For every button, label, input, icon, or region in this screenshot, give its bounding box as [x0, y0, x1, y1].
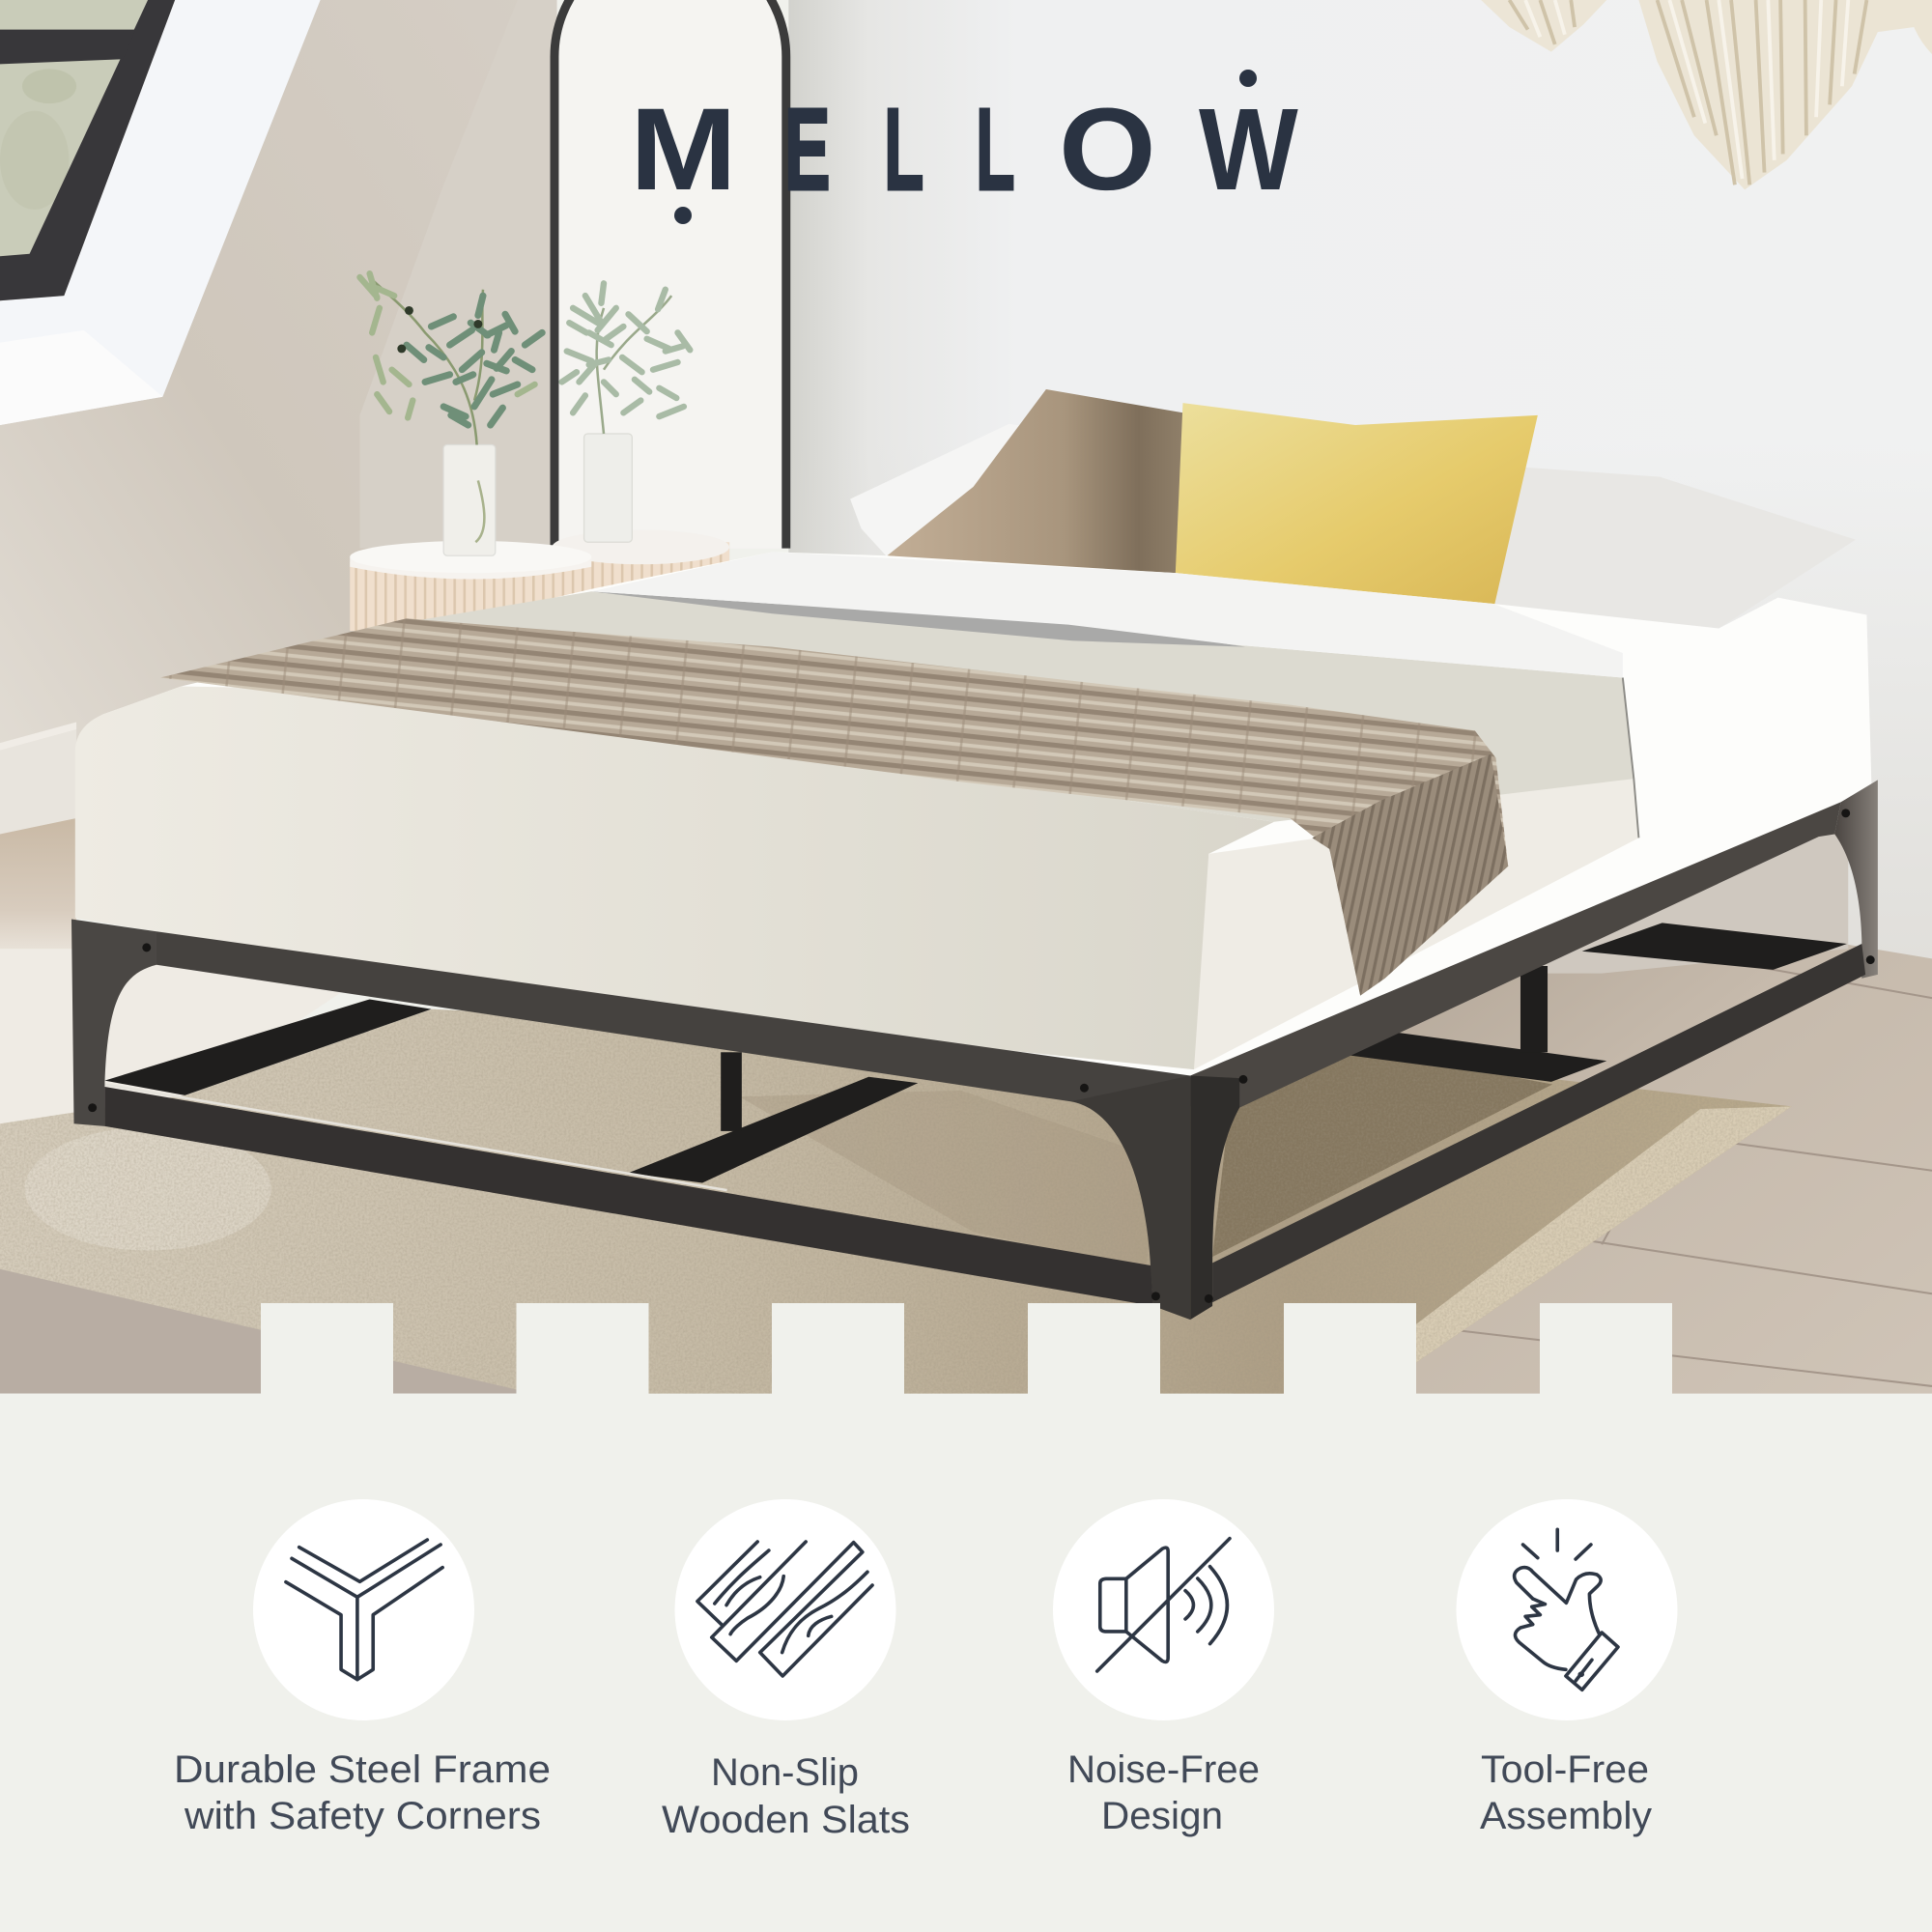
- logo: MELLOW: E: [784, 83, 830, 214]
- feature: noise-free: [1053, 1499, 1274, 1837]
- label: noise-free design: [1067, 1748, 1260, 1837]
- front left leg: [71, 920, 156, 1126]
- label: wooden slats: Wooden Slats: [662, 1799, 910, 1841]
- label: noise-free design: Noise-Free: [1067, 1748, 1260, 1791]
- rug: [0, 1005, 1799, 1410]
- macrame wall hanging: [1481, 0, 1932, 189]
- label: durable steel frame: [174, 1748, 551, 1837]
- logo: MELLOW: O: [1059, 83, 1156, 214]
- front rail top: [156, 931, 1190, 1106]
- round side table: [350, 541, 591, 631]
- crenellated panel notches: [261, 1303, 1672, 1395]
- label: tool-free assembly: Assembly: [1480, 1795, 1652, 1837]
- bedroom photo scene: [0, 0, 1932, 1410]
- panel: features: [0, 1394, 1932, 1932]
- icon: steel corner: [253, 1499, 474, 1720]
- icon: muted speaker: [1053, 1499, 1274, 1720]
- label: noise-free design: Design: [1101, 1795, 1223, 1837]
- rear wall under bed: [1543, 829, 1849, 974]
- sloped beige wall: [0, 0, 557, 863]
- logo: MELLOW: L: [884, 83, 923, 214]
- rear right leg: [1834, 780, 1878, 979]
- reflected vase and plant: [562, 283, 690, 542]
- label: tool-free assembly: [1480, 1748, 1652, 1837]
- under-bed cross rails: [104, 923, 1847, 1182]
- arched mirror: [554, 0, 786, 549]
- right wall: [788, 0, 1932, 985]
- logo: MELLOW: M: [630, 83, 737, 214]
- label: durable steel frame: with Safety Corners: [184, 1795, 541, 1837]
- feature: wooden slats: [662, 1499, 910, 1841]
- skylight window: [0, 0, 321, 425]
- floor left: [0, 818, 76, 949]
- logo: MELLOW: W: [1199, 83, 1298, 214]
- side rail bottom: [1212, 944, 1865, 1302]
- pillow white right: [1505, 468, 1855, 558]
- pillow yellow: [1176, 403, 1538, 610]
- knit throw blanket: [160, 618, 1508, 996]
- reflected side table: [553, 541, 730, 589]
- logo: MELLOW: L: [976, 83, 1015, 214]
- mattress: [75, 552, 1871, 1078]
- label: durable steel frame: Durable Steel Frame: [174, 1748, 551, 1791]
- olive plant: [359, 273, 542, 444]
- floor right with planks: [1234, 945, 1932, 1394]
- label: wooden slats: Non-Slip: [711, 1751, 859, 1794]
- feature: durable steel frame: [174, 1499, 551, 1837]
- label: wooden slats: [662, 1751, 910, 1841]
- front rail bottom: [104, 1087, 1153, 1306]
- icon: snapping fingers: [1457, 1499, 1677, 1720]
- side rail top: [1190, 802, 1841, 1108]
- floor bottom left: [0, 1263, 542, 1394]
- frame screws: [88, 809, 1875, 1303]
- vase: [443, 444, 496, 555]
- label: tool-free assembly: Tool-Free: [1481, 1748, 1649, 1791]
- front corner leg: [1070, 1076, 1239, 1320]
- pillow taupe: [887, 389, 1182, 579]
- feature: tool-free: [1457, 1499, 1677, 1837]
- logo: MELLOW: [630, 70, 1298, 224]
- pillow white back left: [850, 438, 999, 556]
- icon: wooden planks: [674, 1499, 896, 1720]
